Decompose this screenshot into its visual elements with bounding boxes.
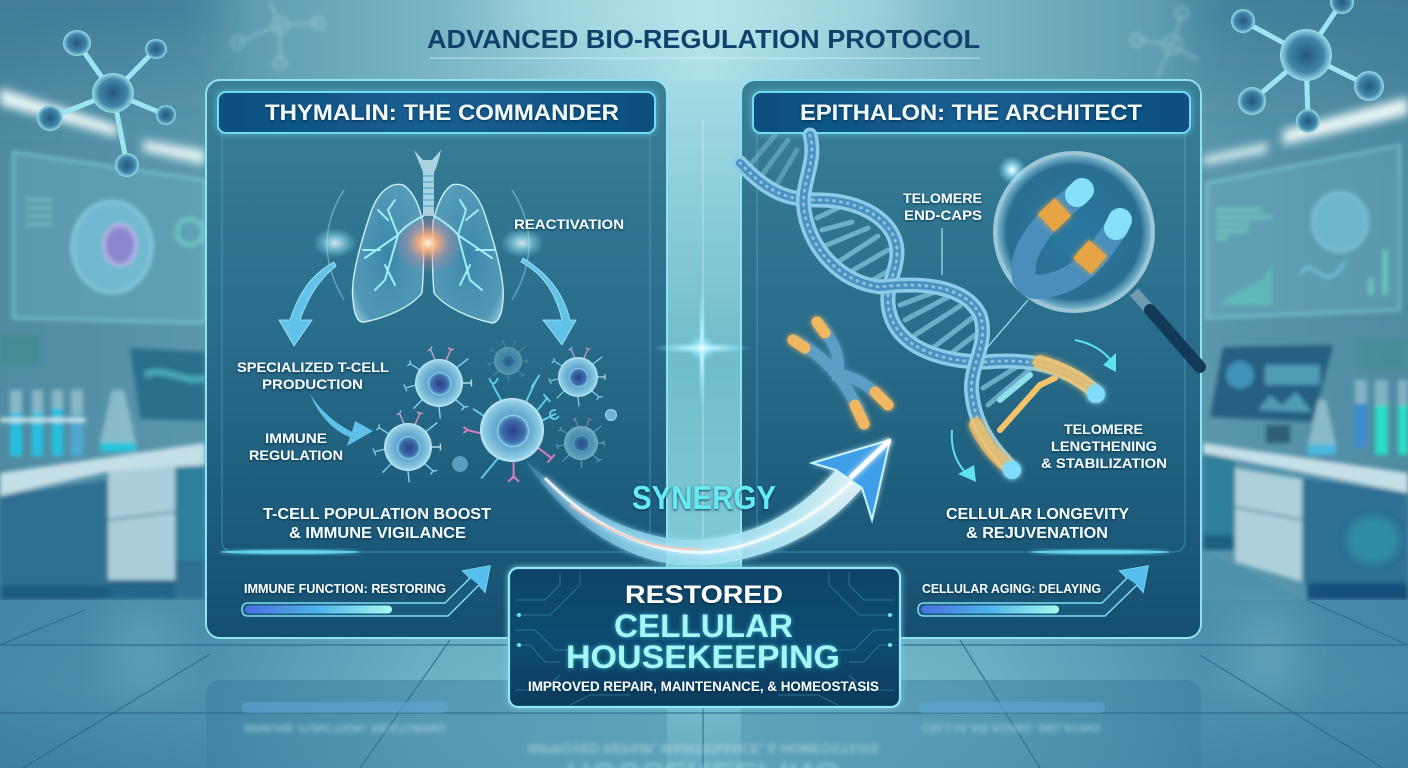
arrow: lengthening top [1075,340,1112,362]
label: telomere end-caps [903,190,982,223]
status: immune function: IMMUNE FUNCTION: RESTORING [244,582,446,596]
right lab bench and screen [1203,97,1408,600]
arrow: production to cells [310,394,373,446]
icon: chromosome [793,322,888,424]
arrow: lung to T-cell right [521,258,576,345]
panel: Epithalon [740,80,1201,638]
label: immune regulation [249,430,343,463]
label: reactivation: REACTIVATION [514,216,624,232]
label: telomere end-caps: TELOMERE [903,190,982,206]
icon: magnifier [995,153,1200,367]
panel: restored cellular housekeeping: IMPROVED REPAIR, MAINTENANCE, & HOMEOSTASIS [528,679,879,694]
heading pill: Thymalin [218,92,655,133]
heading pill: Thymalin: THYMALIN: THE COMMANDER [265,100,619,125]
label: T-cell population boost [263,506,491,542]
central light column [667,80,741,640]
label: telomere lengthening: TELOMERE [1064,421,1143,437]
arrow: lung to T-cell left [279,262,336,346]
label: specialized T-cell production [237,359,389,392]
panel: floor reflections: IMPROVED REPAIR, MAINTENANCE, & HOMEOSTASIS [528,741,879,756]
panel: restored cellular housekeeping: HOUSEKEEPING [566,639,840,675]
faint background molecule right [1131,7,1198,77]
title: ADVANCED BIO-REGULATION PROTOCOL [427,24,980,54]
heading pill: Epithalon: EPITHALON: THE ARCHITECT [800,100,1143,125]
arrow: synergy swoosh [525,440,890,566]
central lens flare [652,278,752,418]
label: cellular longevity: & REJUVENATION [966,525,1108,542]
faint background molecule left [232,3,324,69]
status: cellular aging [918,566,1148,616]
panel: Thymalin [206,80,667,638]
label: telomere lengthening [1041,421,1167,471]
status: cellular aging: CELLULAR AGING: DELAYING [922,582,1101,596]
icon: molecule top right [1231,0,1384,133]
heading pill: Epithalon [753,92,1190,133]
icon: DNA helix [740,135,1105,479]
T-cell cluster [373,340,616,482]
label: telomere lengthening: LENGTHENING [1051,438,1157,454]
panel: floor reflections: IMMUNE FUNCTION: RESTORING [244,721,446,735]
panel: floor reflections: CELLULAR AGING: DELAYING [922,721,1101,735]
left lab bench and screen [0,88,205,600]
label: telomere lengthening: & STABILIZATION [1041,455,1167,471]
panel: restored cellular housekeeping [509,568,900,707]
label: immune regulation: IMMUNE [265,430,327,446]
label: cellular longevity: CELLULAR LONGEVITY [946,506,1129,523]
icon: lungs [305,150,550,323]
label: telomere end-caps: END-CAPS [904,207,982,223]
label: synergy: SYNERGY [632,479,776,516]
panel: restored cellular housekeeping: CELLULAR [614,608,793,644]
panel: restored cellular housekeeping: RESTORED [625,581,783,609]
label: specialized T-cell production: SPECIALIZED T-CELL [237,359,389,375]
arrow: lengthening bottom [952,430,965,472]
status: immune function [242,566,490,616]
label: T-cell population boost: & IMMUNE VIGILANCE [289,525,466,542]
label: T-cell population boost: T-CELL POPULATION BOOST [263,506,491,523]
floor [0,550,1408,768]
label: immune regulation: REGULATION [249,447,343,463]
icon: molecule top left [37,30,176,177]
circuit pattern [515,572,894,705]
panel: floor reflections [206,680,1201,768]
label: specialized T-cell production: PRODUCTION [262,376,363,392]
label: cellular longevity [946,506,1129,542]
